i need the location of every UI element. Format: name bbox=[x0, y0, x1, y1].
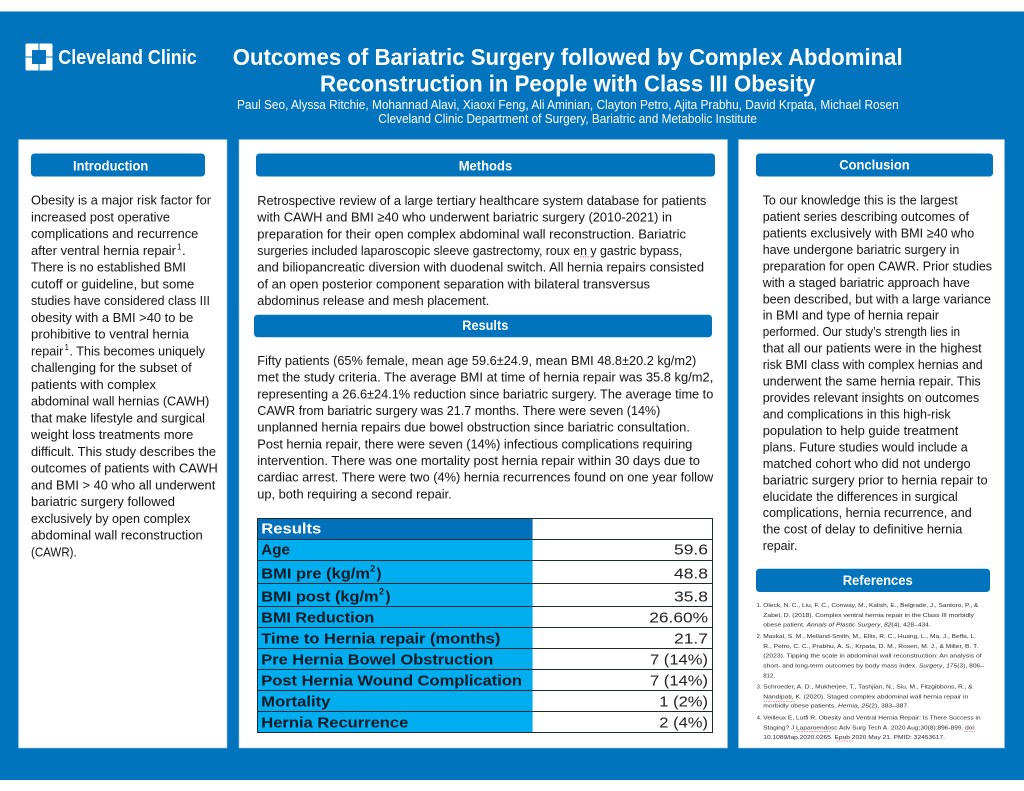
table row labels: BMI post (kg/m bbox=[261, 588, 379, 605]
text block: methods: and biliopancreatic diversion with duodenal switch. All hernia repairs consisted bbox=[257, 260, 704, 275]
text block: introduction: . bbox=[182, 243, 186, 258]
authors and affiliation: Paul Seo, Alyssa Ritchie, Mohannad Alavi, Xiaoxi Feng, Ali Aminian, Clayton Petro, Ajita Prabhu, David Krpata, Michael Rosen bbox=[237, 98, 899, 112]
text block: conclusion: been described, but with a large variance bbox=[763, 291, 991, 306]
reference list: 812. bbox=[763, 673, 775, 679]
text block: conclusion: have undergone bariatric surgery in bbox=[763, 242, 959, 257]
text block: introduction: abdominal wall reconstruction bbox=[31, 528, 203, 542]
table row labels: Time to Hernia repair (months) bbox=[261, 630, 500, 647]
text block: conclusion: elucidate the differences in surgical bbox=[763, 489, 958, 504]
table values: 1 (2%) bbox=[659, 694, 708, 710]
heading: conclusion bbox=[756, 154, 993, 176]
text block: methods: abdominus release and mesh placement. bbox=[257, 293, 489, 308]
text block: introduction: repair bbox=[31, 343, 64, 358]
table row labels: Hernia Recurrence bbox=[261, 714, 408, 731]
text block: introduction: difficult. This study describes the bbox=[31, 444, 216, 459]
table row labels: ) bbox=[386, 588, 390, 605]
reference list bbox=[757, 603, 985, 741]
text block: introduction: weight loss treatments more bbox=[30, 427, 193, 442]
results table bbox=[258, 518, 712, 732]
text block: conclusion: repair. bbox=[763, 538, 797, 553]
reference list: 4. bbox=[757, 716, 762, 722]
text block: methods bbox=[256, 193, 707, 308]
text block: introduction: that make lifestyle and surgical bbox=[31, 410, 205, 425]
heading: introduction bbox=[31, 154, 205, 176]
text block: conclusion: population to help guide treatment bbox=[763, 423, 959, 438]
text block: conclusion: bariatric surgery prior to hernia repair to bbox=[763, 472, 988, 487]
text block: results bbox=[257, 353, 714, 501]
table row labels bbox=[261, 520, 522, 731]
text block: conclusion: matched cohort who did not undergo bbox=[763, 456, 971, 471]
panel: conclusion and references bbox=[738, 140, 1004, 748]
logo: Cleveland Clinic: Cleveland Clinic bbox=[58, 47, 197, 69]
heading: methods bbox=[256, 154, 715, 176]
text block: results: cardiac arrest. There were two (4%) hernia recurrences found on one year follow bbox=[257, 470, 714, 485]
reference list: morbidly obese patients. Hernia , 25(2), 383–387. bbox=[763, 704, 910, 710]
text block: introduction: studies have considered class III bbox=[31, 293, 210, 308]
reference list: Zabel, D. (2018). Complex ventral hernia repair in the Class III morbidly bbox=[763, 613, 974, 619]
table row labels: 2 bbox=[379, 586, 384, 596]
logo: Cleveland Clinic bbox=[26, 44, 197, 70]
text block: conclusion: patients exclusively with BMI ≥40 who bbox=[763, 225, 974, 240]
table row labels: Post Hernia Wound Complication bbox=[261, 672, 522, 689]
heading: conclusion: Conclusion bbox=[839, 157, 910, 173]
text block: conclusion: in BMI and type of hernia repair bbox=[763, 308, 940, 323]
text block: introduction: exclusively by open complex bbox=[31, 511, 191, 526]
reference list: Schroeder, A. D., Mukherjee, T., Tashjian, N., Siu, M., Fitzgibbons, R., & bbox=[763, 685, 973, 691]
text block: results: Fifty patients (65% female, mean age 59.6±24.9, mean BMI 48.8±20.2 kg/m2) bbox=[257, 353, 696, 368]
text block: conclusion bbox=[762, 192, 992, 553]
text block: introduction: cutoff or guideline, but some bbox=[31, 276, 194, 291]
text block: introduction: There is no established BMI bbox=[31, 260, 186, 274]
text block: introduction: challenging for the subset of bbox=[31, 360, 192, 375]
table row labels: Mortality bbox=[261, 694, 331, 710]
reference list: R., Petro, C. C., Prabhu, A. S., Krpata, D. M., Rosen, M. J., & Miller, B. T. bbox=[763, 644, 979, 650]
text block: introduction: obesity with a BMI >40 to be bbox=[31, 310, 193, 325]
text block: introduction: prohibitive to ventral hernia bbox=[31, 326, 190, 342]
text block: conclusion: plans. Future studies would include a bbox=[763, 439, 968, 454]
table values bbox=[649, 542, 708, 731]
title: Outcomes of Bariatric Surgery followed by Complex Abdominal bbox=[233, 44, 903, 70]
table values: 7 (14%) bbox=[650, 672, 708, 689]
text block: introduction: after ventral hernia repair bbox=[31, 243, 177, 258]
table row labels: 2 bbox=[370, 564, 375, 574]
text block: introduction: increased post operative bbox=[31, 209, 170, 224]
text block: introduction: . This becomes uniquely bbox=[70, 343, 205, 358]
table row labels: BMI Reduction bbox=[261, 609, 374, 626]
reference list: (2023). Tipping the scale in abdominal wall reconstruction: An analysis of bbox=[763, 654, 982, 660]
table row labels: Pre Hernia Bowel Obstruction bbox=[261, 651, 493, 668]
text block: conclusion: complications, hernia recurrence, and bbox=[763, 505, 972, 520]
heading: references: References bbox=[843, 572, 913, 588]
table values: 26.60% bbox=[649, 609, 708, 626]
text block: introduction: complications and recurrence bbox=[31, 226, 198, 241]
authors and affiliation bbox=[237, 98, 899, 126]
text block: conclusion: with a staged bariatric approach have bbox=[762, 275, 970, 290]
heading: methods: Methods bbox=[459, 158, 512, 174]
text block: introduction: bariatric surgery followed bbox=[31, 494, 175, 509]
text block: introduction: patients with complex bbox=[31, 377, 156, 392]
text block: introduction: outcomes of patients with CAWH bbox=[31, 460, 218, 476]
text block: conclusion: provides relevant insights on outcomes bbox=[763, 390, 980, 405]
reference list: 10.1089/lap.2020.0265. Epub 2020 May 21. PMID: 32453617. bbox=[763, 735, 946, 741]
text block: conclusion: To our knowledge this is the largest bbox=[763, 192, 958, 208]
title bbox=[233, 44, 903, 97]
reference list: Maskal, S. M., Melland-Smith, M., Ellis, R. C., Huang, L., Ma, J., Beffa, L. bbox=[763, 634, 977, 640]
text block: introduction: (CAWR). bbox=[31, 544, 77, 559]
text block: conclusion: performed. Our study’s strength lies in bbox=[763, 324, 960, 339]
text block: methods: preparation for their open complex abdominal wall reconstruction. Bariatric bbox=[257, 226, 686, 241]
text block: methods: Retrospective review of a large tertiary healthcare system database for patients bbox=[257, 193, 707, 208]
panel: introduction bbox=[18, 140, 227, 748]
text block: results: CAWR from bariatric surgery was 21.7 months. There were seven (14%) bbox=[257, 403, 660, 418]
reference list: 1. bbox=[757, 603, 762, 609]
text block: conclusion: the cost of delay to definitive hernia bbox=[763, 522, 963, 537]
text block: conclusion: that all our patients were in the highest bbox=[763, 341, 982, 356]
authors and affiliation: Cleveland Clinic Department of Surgery, Bariatric and Metabolic Institute bbox=[378, 112, 757, 126]
text block: conclusion: risk BMI class with complex hernias and bbox=[763, 357, 983, 372]
title: Reconstruction in People with Class III Obesity bbox=[320, 71, 815, 97]
reference list: Veilleux E, Lutfi R. Obesity and Ventral Hernia Repair: Is There Success in bbox=[763, 716, 981, 722]
heading: introduction: Introduction bbox=[73, 158, 148, 174]
table values: 35.8 bbox=[674, 588, 708, 605]
heading: results bbox=[254, 315, 712, 337]
reference list: obese patient. Annals of Plastic Surgery , 82(4), 428–434. bbox=[763, 622, 931, 628]
text block: results: intervention. There was one mortality post hernia repair within 30 days due to bbox=[257, 453, 700, 468]
text block: conclusion: and complications in this high-risk bbox=[763, 406, 951, 422]
text block: results: met the study criteria. The average BMI at time of hernia repair was 35.8 kg/m2, bbox=[257, 370, 713, 385]
text block: conclusion: patient series describing outcomes of bbox=[763, 209, 969, 224]
reference list: Oleck, N. C., Liu, F. C., Conway, M., Kalish, E., Belgrade, J., Santoro, P., & bbox=[763, 603, 979, 609]
text block: conclusion: underwent the same hernia repair. This bbox=[763, 374, 981, 389]
table values: 21.7 bbox=[674, 630, 708, 647]
heading: references bbox=[756, 569, 990, 592]
text block: results: Post hernia repair, there were seven (14%) infectious complications requiring bbox=[257, 436, 692, 451]
table row labels: Age bbox=[261, 542, 290, 558]
reference list: Nandipati, K. (2020). Staged complex abdominal wall hernia repair in bbox=[763, 694, 968, 700]
reference list: 2. bbox=[757, 634, 762, 640]
table values: 2 (4%) bbox=[659, 714, 708, 731]
text block: introduction bbox=[30, 192, 218, 559]
reference list: Staging? J Laparoendosc Adv Surg Tech A. 2020 Aug;30(8):896-899. doi: bbox=[763, 726, 976, 732]
text block: methods: of an open posterior component separation with bilateral transversus bbox=[257, 276, 650, 291]
header bbox=[26, 44, 903, 126]
text block: methods: surgeries included laparoscopic sleeve gastrectomy, roux en y gastric bypass, bbox=[257, 243, 682, 258]
table row labels: BMI pre (kg/m bbox=[261, 565, 370, 582]
text block: results: unplanned hernia repairs due bowel obstruction since bariatric consultation. bbox=[257, 420, 690, 435]
text block: introduction: 1 bbox=[177, 242, 182, 252]
text block: introduction: Obesity is a major risk factor for bbox=[31, 192, 212, 208]
table values: 59.6 bbox=[674, 542, 708, 558]
table row labels: ) bbox=[376, 565, 382, 582]
text block: conclusion: preparation for open CAWR. Prior studies bbox=[763, 258, 992, 273]
text block: methods: with CAWH and BMI ≥40 who underwent bariatric surgery (2010-2021) in bbox=[256, 210, 672, 225]
panel: methods and results bbox=[239, 140, 728, 748]
reference list: short- and long-term outcomes by body mass index. Surgery , 175 (3), 806– bbox=[763, 663, 985, 669]
table values: 7 (14%) bbox=[650, 651, 708, 668]
reference list: 3. bbox=[757, 685, 762, 691]
text block: results: representing a 26.6±24.1% reduction since bariatric surgery. The average time to bbox=[257, 386, 713, 401]
table row labels: Results bbox=[261, 520, 321, 538]
text block: introduction: 1 bbox=[64, 343, 70, 352]
text block: introduction: abdominal wall hernias (CAWH) bbox=[31, 394, 209, 408]
text block: introduction: and BMI > 40 who all underwent bbox=[31, 477, 216, 492]
heading: results: Results bbox=[462, 317, 508, 333]
text block: results: up, both requiring a second repair. bbox=[257, 486, 452, 501]
table values: 48.8 bbox=[674, 565, 708, 582]
